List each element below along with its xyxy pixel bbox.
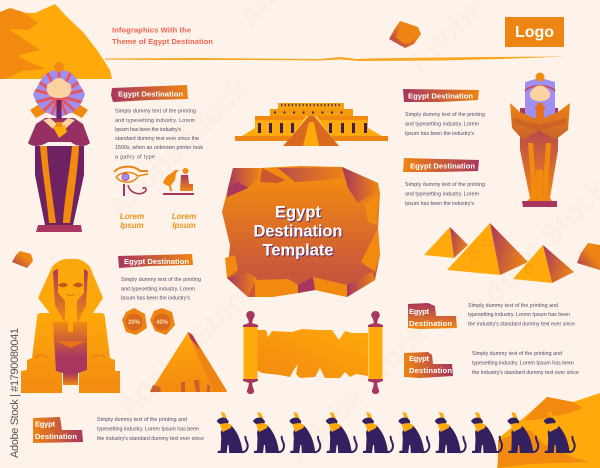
rock right [577, 243, 600, 270]
text block five: Simply dummy text of the printing and [97, 417, 187, 423]
text block four: and typesetting industry. Lorem [121, 286, 196, 292]
text block one: and typesetting industry. Lorem [115, 118, 196, 124]
mountain bottom right [497, 393, 600, 468]
pyramids group [424, 223, 574, 283]
text block seven: typesetting industry. Lorem Ipsum has been [472, 360, 574, 366]
scroll [243, 311, 383, 394]
adobe stock vertical credit: Adobe Stock | #1790080041 [9, 328, 21, 458]
temple [235, 103, 388, 146]
text block four: Ipsum has been the industry's [121, 296, 190, 302]
body [21, 313, 120, 393]
text block seven [472, 351, 579, 376]
face [58, 266, 84, 332]
text block five: typesetting industry. Lorem Ipsum has been [97, 426, 199, 432]
text block three [405, 182, 485, 207]
label: lorem ipsum left [120, 212, 144, 230]
watermark: Adobe Stock [112, 272, 265, 425]
banner: heading four: Egypt Destination [124, 257, 189, 266]
text block three: Simply dummy text of the printing [405, 182, 485, 188]
hood [38, 259, 103, 322]
pyramid ruin [150, 332, 227, 392]
text block two: and typesetting industry. Lorem [405, 122, 480, 128]
shoulders [28, 118, 90, 146]
badge: 40 percent [150, 308, 175, 335]
banner: bottom left: Destination [35, 432, 77, 441]
robe stripes [40, 146, 79, 223]
text block one: standard dummy text ever since the [115, 136, 199, 142]
watermark: Adobe Stock [282, 317, 435, 468]
banner: heading three [403, 158, 479, 172]
central heading: Egypt [276, 204, 322, 222]
central heading: Template [264, 242, 334, 260]
label: lorem ipsum left: Ipsum [120, 221, 144, 230]
text block two: Ipsum has been the industry's [405, 131, 474, 137]
pharaoh sarcophagus left [26, 62, 92, 232]
text block one [115, 108, 203, 160]
logo: Logo [515, 24, 554, 41]
central heading: Destination [254, 222, 342, 240]
logo [505, 17, 564, 47]
banner: middle right one: Destination [409, 319, 452, 328]
text block six: the industry's standard dummy text ever since [468, 322, 575, 328]
title: Infographics With the [112, 26, 191, 34]
chest [53, 322, 87, 385]
text block five [97, 417, 204, 442]
central heading: Egypt [275, 204, 322, 222]
banner: middle right one: Egypt [409, 307, 429, 316]
face [47, 78, 71, 98]
banner: heading one: Egypt Destination [118, 90, 183, 98]
text block three: Ipsum has been the industry's [405, 201, 474, 207]
banner: middle right two: Egypt [409, 354, 429, 363]
beard [56, 100, 62, 119]
central heading: Destination [254, 224, 344, 242]
text block two: Simply dummy text of the printing [405, 112, 485, 118]
banner: heading two [403, 89, 479, 102]
title [112, 26, 213, 46]
stone facets [227, 168, 260, 197]
text block one: a gallry of type [115, 154, 155, 160]
badge: 40 percent: 40% [156, 320, 169, 326]
central heading: Template [262, 242, 334, 260]
rock left [12, 251, 33, 268]
text block four: Simply dummy text of the printing [121, 277, 201, 283]
text block four [121, 277, 201, 302]
banner: bottom left [33, 417, 83, 443]
banner: heading four [118, 254, 193, 268]
row of cats [217, 412, 575, 453]
text block five: the industry's standard dummy text ever since [97, 436, 204, 442]
rock top [389, 21, 421, 48]
badge: 20 percent: 20% [128, 320, 141, 326]
text block six [468, 303, 575, 328]
central heading [254, 204, 344, 260]
banner: bottom left: Egypt [35, 420, 55, 428]
text block one: Ipsum has been the industry's [115, 127, 181, 133]
collar blocks [30, 103, 88, 118]
banner: middle right one [408, 303, 457, 329]
body [35, 146, 84, 225]
sphinx [21, 259, 120, 393]
banner: heading three: Egypt Destination [410, 162, 475, 170]
watermark: Adobe Stock [102, 72, 255, 225]
inner hood [53, 267, 88, 322]
text block three: and typesetting industry. Lorem [405, 192, 480, 198]
label: lorem ipsum left: Lorem [120, 212, 144, 221]
banner: heading two: Egypt Destination [408, 92, 473, 100]
pharaoh sarcophagus right [510, 72, 570, 207]
text block two [405, 112, 485, 137]
text block seven: the industry's standard dummy text ever since [472, 370, 579, 376]
text block seven: Simply dummy text of the printing and [472, 351, 562, 357]
label: lorem ipsum right [172, 212, 196, 230]
crossed arms [43, 118, 75, 129]
banner: middle right two [404, 352, 453, 378]
banner: middle right two: Destination [409, 366, 452, 375]
label: lorem ipsum right: Lorem [172, 212, 196, 221]
text block six: typesetting industry. Lorem Ipsum has been [468, 312, 570, 318]
text block six: Simply dummy text of the printing and [468, 303, 558, 309]
mountain top left [0, 4, 112, 79]
divider brush line [105, 56, 566, 61]
base [36, 225, 82, 232]
title: Theme of Egypt Destination [112, 37, 213, 46]
icon: hieroglyph bird and figure [163, 168, 194, 195]
central stone panel [222, 166, 380, 297]
nemes headdress [33, 70, 85, 117]
icon: eye of horus [114, 167, 148, 196]
badge: 20 percent [122, 308, 147, 335]
label: lorem ipsum right: Ipsum [172, 221, 196, 230]
text block one: Simply dummy text of the printing [115, 108, 196, 114]
text block one: 1500s, when an unknown printer took [115, 145, 203, 151]
banner: heading one [111, 85, 188, 102]
